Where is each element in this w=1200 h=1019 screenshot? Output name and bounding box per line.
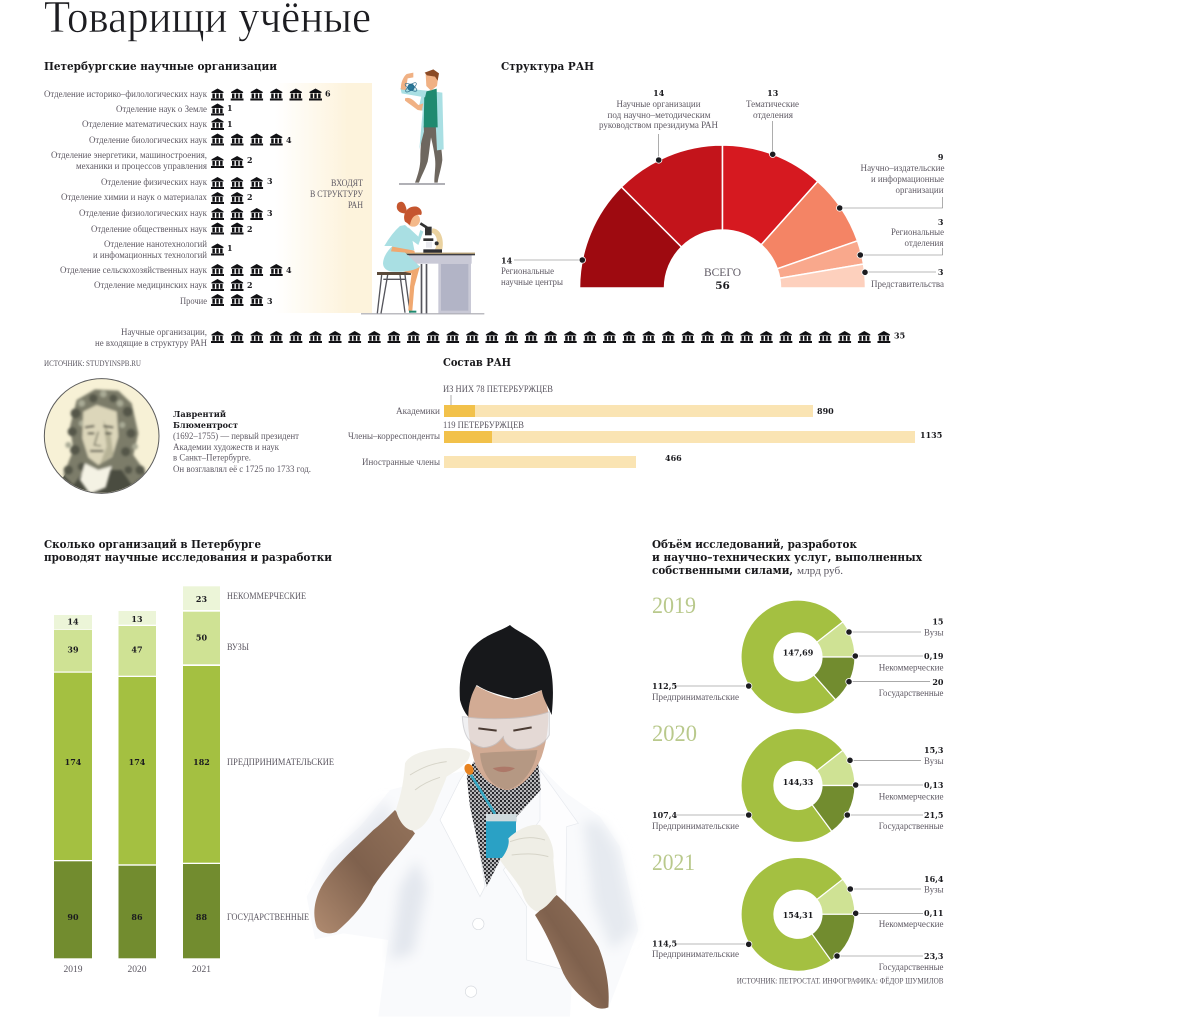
stacked bar: 2020 bbox=[118, 611, 156, 975]
row: other: Прочие bbox=[180, 297, 207, 307]
text block: Blumentrost biography: (1692–1755) — первый президент bbox=[173, 431, 300, 442]
chart: semicircle of 56 units bbox=[580, 145, 866, 288]
row: physics: Отделение физических наук bbox=[101, 177, 207, 188]
text block: Blumentrost biography: Блюментрост bbox=[173, 420, 238, 430]
source: studyinspb: ИСТОЧНИК: STUDYINSPB.RU bbox=[44, 359, 141, 368]
stacked bar: 2020: 174 bbox=[129, 757, 146, 767]
donut: 2021: 23,3 bbox=[924, 951, 944, 961]
row: outside RAS structure bbox=[95, 328, 905, 349]
callout: thematic divisions: Тематические bbox=[746, 100, 799, 110]
stacked bar: 2019: 14 bbox=[67, 616, 79, 626]
donut: 2020: Некоммерческие bbox=[879, 793, 944, 803]
stacked bar: 2021: 23 bbox=[196, 594, 207, 604]
row: medicine: Отделение медицинских наук bbox=[94, 281, 207, 291]
donut: 2021: 0,11 bbox=[924, 908, 944, 918]
panel: RAS membership bbox=[348, 356, 942, 468]
row: social sciences: Отделение общественных наук bbox=[91, 224, 207, 235]
donut: 2020: 15,3 bbox=[924, 745, 944, 755]
legend: organisation types: ВУЗЫ bbox=[227, 643, 249, 653]
callout: representative offices bbox=[862, 267, 945, 290]
donut: 2021: 2021 bbox=[652, 850, 695, 875]
row: history and philology: 6 bbox=[325, 88, 331, 98]
portrait: Blumentrost bbox=[44, 379, 159, 497]
stacked bar: 2021: 88 bbox=[196, 912, 207, 922]
row: mathematics: 1 bbox=[227, 119, 233, 129]
row: nanotechnology: Отделение нанотехнологий bbox=[104, 239, 207, 250]
heading: research volume bbox=[652, 538, 922, 577]
callout: representative offices: 3 bbox=[938, 267, 944, 277]
donut: 2020: Вузы bbox=[924, 757, 944, 767]
donut: 2019: Предпринимательские bbox=[652, 693, 739, 703]
stacked bar: 2019: 174 bbox=[65, 757, 82, 767]
donut: 2019: 20 bbox=[932, 677, 944, 687]
donut: 2020: Государственные bbox=[879, 822, 944, 832]
chart centre: total: 56 bbox=[715, 280, 730, 292]
chart centre: total: ВСЕГО bbox=[704, 267, 741, 279]
illustration: male scientist with atom bbox=[399, 69, 445, 185]
row: history and philology: Отделение историко–филологических наук bbox=[44, 89, 207, 100]
text block: Blumentrost biography: Академии художеств и наук bbox=[173, 443, 279, 453]
text block: Blumentrost biography: Лаврентий bbox=[173, 409, 226, 419]
row: outside RAS structure: не входящие в структуру РАН bbox=[95, 339, 207, 349]
row: physics: 3 bbox=[267, 176, 273, 186]
row: earth sciences bbox=[116, 103, 233, 116]
row: other: 3 bbox=[267, 296, 273, 306]
text block: Blumentrost biography: в Санкт–Петербурге. bbox=[173, 452, 251, 464]
legend: organisation types bbox=[227, 592, 334, 923]
background band: included in RAS bbox=[275, 83, 372, 313]
donut: 2019: 147,69 bbox=[783, 648, 814, 658]
row: social sciences bbox=[91, 222, 253, 235]
legend: organisation types: ПРЕДПРИНИМАТЕЛЬСКИЕ bbox=[227, 758, 334, 768]
panel: number of organisations bbox=[44, 538, 334, 975]
bar: academicians bbox=[396, 385, 834, 417]
stacked bar: 2019: 90 bbox=[67, 912, 79, 922]
stacked bar: 2020: 86 bbox=[131, 912, 143, 922]
row: nanotechnology bbox=[93, 239, 233, 261]
donut: 2020: 21,5 bbox=[924, 810, 944, 820]
donut: 2020: 0,13 bbox=[924, 780, 944, 790]
donut: 2019: Некоммерческие bbox=[879, 664, 944, 674]
bar: academicians: Академики bbox=[396, 407, 440, 417]
donut: 2020: 2020 bbox=[652, 721, 697, 746]
text block: Blumentrost biography bbox=[173, 409, 311, 475]
bar: corresponding members: 119 ПЕТЕРБУРЖЦЕВ bbox=[443, 421, 524, 431]
donut: 2019: 15 bbox=[932, 616, 944, 626]
callout: thematic divisions bbox=[746, 88, 799, 158]
bar: foreign members bbox=[362, 453, 682, 468]
row: chemistry: Отделение химии и наук о материалах bbox=[61, 193, 207, 203]
row: social sciences: 2 bbox=[247, 224, 253, 234]
donut: 2021: 114,5 bbox=[652, 938, 677, 948]
bar: corresponding members: Члены–корреспонденты bbox=[348, 432, 441, 442]
text block: Blumentrost biography: Он возглавлял её с 1725 по 1733 год. bbox=[173, 465, 311, 475]
callout: regional divisions: 3 bbox=[938, 217, 944, 227]
callout: regional science centres bbox=[501, 256, 586, 288]
row: energy and mechanics: Отделение энергетики, машиностроения, bbox=[51, 151, 207, 161]
panel: Saint Petersburg research organisations bbox=[44, 60, 905, 368]
callout: publishing and information organisations: Научно–издательские bbox=[860, 164, 944, 174]
callout: publishing and information organisations: и информационные bbox=[871, 174, 944, 185]
row: physics bbox=[101, 176, 273, 189]
donut: 2019: 0,19 bbox=[924, 651, 944, 661]
donut: 2021: Вузы bbox=[924, 886, 944, 896]
row: physiology: 3 bbox=[267, 208, 273, 218]
row: nanotechnology: 1 bbox=[227, 243, 233, 253]
callout: regional divisions bbox=[857, 217, 944, 258]
row: medicine bbox=[94, 279, 253, 291]
row: earth sciences: Отделение наук о Земле bbox=[116, 105, 207, 115]
donut: 2021: Государственные bbox=[879, 963, 944, 973]
row: physiology: Отделение физиологических наук bbox=[79, 208, 207, 219]
callout: regional divisions: Региональные bbox=[891, 228, 944, 238]
callout: regional science centres: научные центры bbox=[501, 278, 564, 288]
stacked bar: 2019: 39 bbox=[67, 644, 79, 654]
chart centre: total bbox=[704, 267, 741, 292]
label: included in RAS structure: ВХОДЯТ bbox=[331, 179, 363, 189]
stacked bar: 2021: 2021 bbox=[192, 965, 211, 975]
row: biology: Отделение биологических наук bbox=[89, 135, 207, 146]
panel: RAS structure bbox=[501, 60, 945, 292]
callout: regional science centres: Региональные bbox=[501, 267, 554, 277]
row: chemistry bbox=[61, 192, 253, 204]
panel: research volume bbox=[652, 538, 944, 986]
stacked bar: 2021 bbox=[183, 586, 220, 975]
donut: 2019: 2019 bbox=[652, 593, 696, 618]
heading: RAS structure: Структура РАН bbox=[501, 60, 594, 73]
heading: organisations doing research: проводят научные исследования и разработки bbox=[44, 551, 332, 564]
heading: research volume: и научно–технических услуг, выполненных bbox=[652, 551, 922, 564]
legend: organisation types: ГОСУДАРСТВЕННЫЕ bbox=[227, 913, 309, 923]
heading: RAS membership: Состав РАН bbox=[443, 356, 511, 369]
callout: publishing and information organisations: 9 bbox=[938, 152, 944, 162]
stacked bar: 2020: 2020 bbox=[128, 965, 147, 975]
donut: 2019: Государственные bbox=[879, 689, 944, 699]
callout: representative offices: Представительства bbox=[871, 280, 945, 290]
illustration: female scientist at microscope bbox=[361, 202, 484, 314]
bar: foreign members: Иностранные члены bbox=[362, 458, 441, 468]
row: agriculture bbox=[60, 264, 292, 276]
infographic canvas bbox=[44, 2, 944, 1009]
stacked bar: 2019 bbox=[54, 615, 92, 975]
bar: corresponding members: 1135 bbox=[920, 430, 942, 440]
heading: research volume: собственными силами, bbox=[652, 564, 793, 577]
heading: organisations: Петербургские научные организации bbox=[44, 60, 277, 73]
photo: scientist in lab coat bbox=[307, 625, 638, 1017]
row: physiology bbox=[79, 208, 273, 220]
heading: organisations doing research: Сколько организаций в Петербурге bbox=[44, 538, 261, 551]
stacked bar: 2021: 182 bbox=[193, 757, 210, 767]
callout: thematic divisions: отделения bbox=[753, 111, 794, 121]
donut: 2021: Некоммерческие bbox=[879, 920, 944, 930]
row: mathematics: Отделение математических наук bbox=[82, 120, 207, 130]
row: energy and mechanics bbox=[51, 151, 253, 172]
bar: academicians: ИЗ НИХ 78 ПЕТЕРБУРЖЦЕВ bbox=[443, 385, 553, 395]
callout: research organisations under presidium: руководством президиума РАН bbox=[599, 121, 718, 131]
row: agriculture: Отделение сельскохозяйственных наук bbox=[60, 265, 207, 276]
row: biology bbox=[89, 134, 292, 146]
stacked bar: 2020: 13 bbox=[131, 614, 143, 624]
callout: research organisations under presidium: 14 bbox=[653, 88, 665, 98]
row: outside RAS structure: Научные организации, bbox=[121, 328, 207, 338]
donut: 2021 bbox=[652, 850, 944, 973]
row: history and philology bbox=[44, 88, 331, 100]
row: medicine: 2 bbox=[247, 280, 253, 290]
bar: foreign members: 466 bbox=[665, 453, 682, 463]
bar: academicians: 890 bbox=[817, 406, 834, 416]
row: outside RAS structure: 35 bbox=[894, 330, 905, 340]
donut: 2020: Предпринимательские bbox=[652, 822, 739, 832]
callout: regional science centres: 14 bbox=[501, 256, 513, 266]
callout: thematic divisions: 13 bbox=[767, 88, 779, 98]
heading: research volume: млрд руб. bbox=[797, 566, 843, 577]
donut: 2020: 107,4 bbox=[652, 810, 677, 820]
donut: 2019: 112,5 bbox=[652, 681, 677, 691]
row: energy and mechanics: механики и процессов управления bbox=[76, 162, 208, 172]
donut: 2019: Вузы bbox=[924, 628, 944, 638]
callout: research organisations under presidium: под научно–методическим bbox=[608, 111, 710, 121]
stacked bar: 2020: 47 bbox=[131, 644, 143, 654]
heading: organisations doing research bbox=[44, 538, 332, 564]
row: other bbox=[180, 294, 273, 307]
row: biology: 4 bbox=[286, 135, 292, 145]
label: included in RAS structure: В СТРУКТУРУ bbox=[310, 190, 363, 200]
row: nanotechnology: и инфомационных технологий bbox=[93, 250, 207, 261]
bar: corresponding members bbox=[348, 421, 942, 443]
heading: research volume: Объём исследований, разработок bbox=[652, 538, 857, 551]
donut: 2021: Предпринимательские bbox=[652, 950, 739, 960]
donut: 2019 bbox=[652, 593, 944, 714]
source and credit: ИСТОЧНИК: ПЕТРОСТАТ. ИНФОГРАФИКА: ФЁДОР ШУМИЛОВ bbox=[737, 976, 944, 986]
donut: 2021: 16,4 bbox=[924, 874, 944, 884]
row: earth sciences: 1 bbox=[227, 103, 233, 113]
label: included in RAS structure bbox=[310, 179, 363, 211]
callout: publishing and information organisations: организации bbox=[896, 186, 944, 196]
label: included in RAS structure: РАН bbox=[348, 201, 363, 211]
stacked bar: 2019: 2019 bbox=[64, 965, 83, 975]
row: agriculture: 4 bbox=[286, 265, 292, 275]
callout: regional divisions: отделения bbox=[904, 239, 944, 249]
donut: 2020 bbox=[652, 721, 944, 843]
row: energy and mechanics: 2 bbox=[247, 155, 253, 165]
stacked bar: 2021: 50 bbox=[196, 632, 207, 642]
donut: 2021: 154,31 bbox=[783, 910, 813, 920]
donut: 2020: 144,33 bbox=[783, 777, 814, 787]
row: chemistry: 2 bbox=[247, 192, 253, 202]
callout: research organisations under presidium: Научные организации bbox=[616, 100, 700, 110]
callout: publishing and information organisations bbox=[836, 152, 944, 211]
callout: research organisations under presidium bbox=[599, 88, 718, 163]
legend: organisation types: НЕКОММЕРЧЕСКИЕ bbox=[227, 592, 306, 602]
